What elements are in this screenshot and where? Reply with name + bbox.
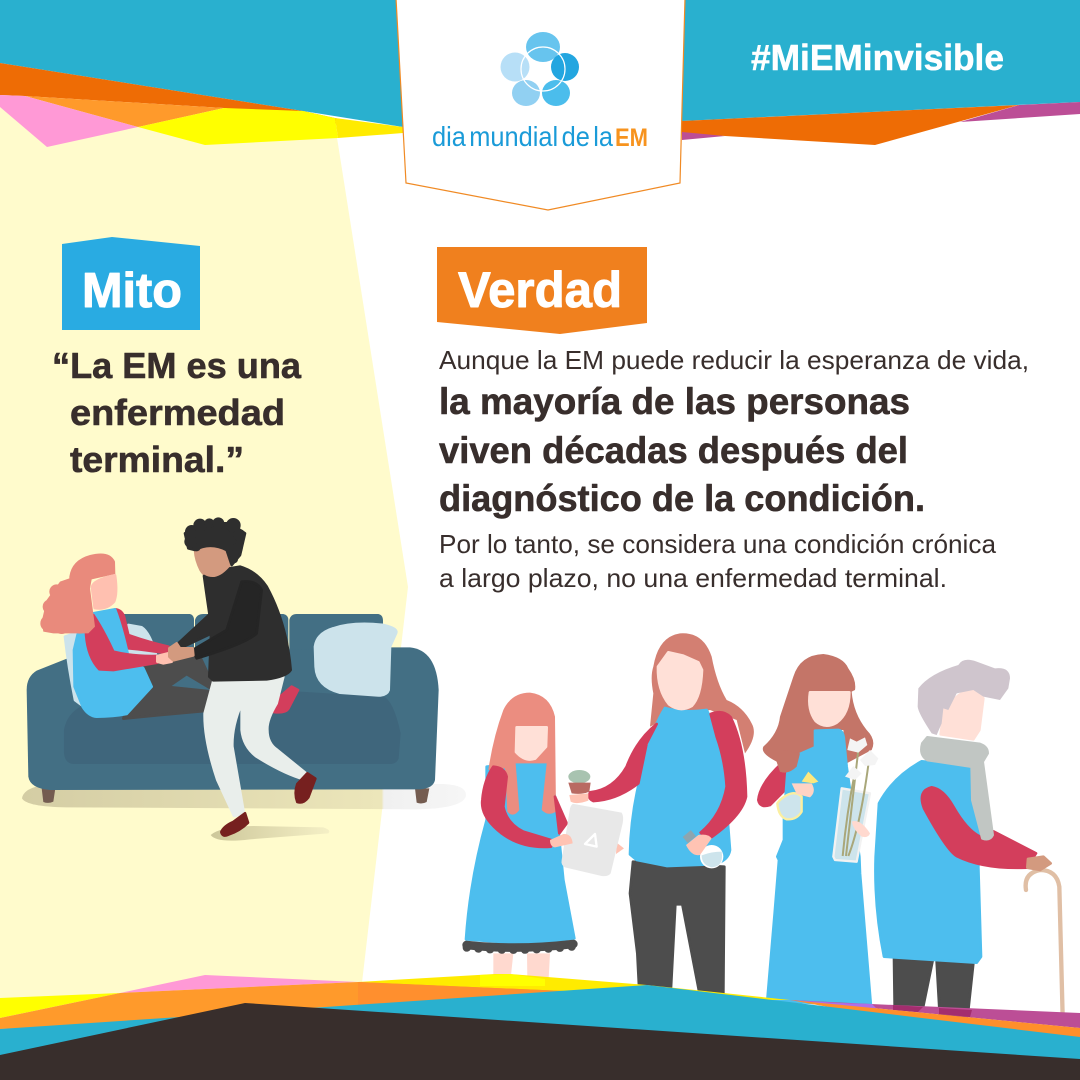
girl with tablet: [466, 693, 624, 978]
top left ribbon: [0, 0, 403, 147]
panel: verdad tag: Verdad: [458, 262, 622, 318]
woman with cactus and flask: [568, 633, 754, 994]
logo wordmark: dia mundial de la: [432, 121, 613, 152]
hashtag: #MiEMinvisible: [751, 37, 1004, 78]
icon: logo petals: [500, 32, 579, 106]
myth quote: terminal.”: [70, 439, 244, 480]
elderly woman with cane: [875, 660, 1063, 1017]
truth closing text: [439, 529, 997, 593]
panel: mito tag: [62, 237, 200, 330]
standing man: [169, 517, 329, 841]
seated woman: [40, 553, 298, 719]
bottom ribbon: [0, 974, 1080, 1080]
woman with spray and vase: [758, 654, 878, 1007]
truth bold statement: viven décadas después del: [439, 430, 908, 471]
truth intro text: Aunque la EM puede reducir la esperanza de vida,: [439, 345, 1029, 375]
myth quote: [52, 345, 302, 480]
truth bold statement: [439, 381, 925, 519]
truth closing text: Por lo tanto, se considera una condición crónica: [439, 529, 997, 559]
myth quote: enfermedad: [70, 392, 285, 433]
truth bold statement: la mayoría de las personas: [439, 381, 910, 422]
illustration: girl and woman with plant: [466, 633, 754, 994]
illustration: woman with flowers and elder with cane: [758, 654, 1063, 1017]
sofa shadow: [22, 784, 466, 809]
truth bold statement: diagnóstico de la condición.: [439, 478, 925, 519]
panel: verdad tag: [437, 247, 647, 334]
sofa: [27, 614, 439, 804]
illustration: couple on sofa: [22, 517, 466, 841]
logo EM: EM: [615, 124, 648, 152]
truth closing text: a largo plazo, no una enfermedad terminal.: [439, 563, 947, 593]
panel: myth yellow background: [0, 100, 408, 1000]
top right ribbon: [682, 0, 1080, 145]
logo badge: [396, 0, 685, 210]
panel: mito tag: Mito: [82, 264, 182, 318]
myth quote: “La EM es una: [52, 345, 302, 386]
